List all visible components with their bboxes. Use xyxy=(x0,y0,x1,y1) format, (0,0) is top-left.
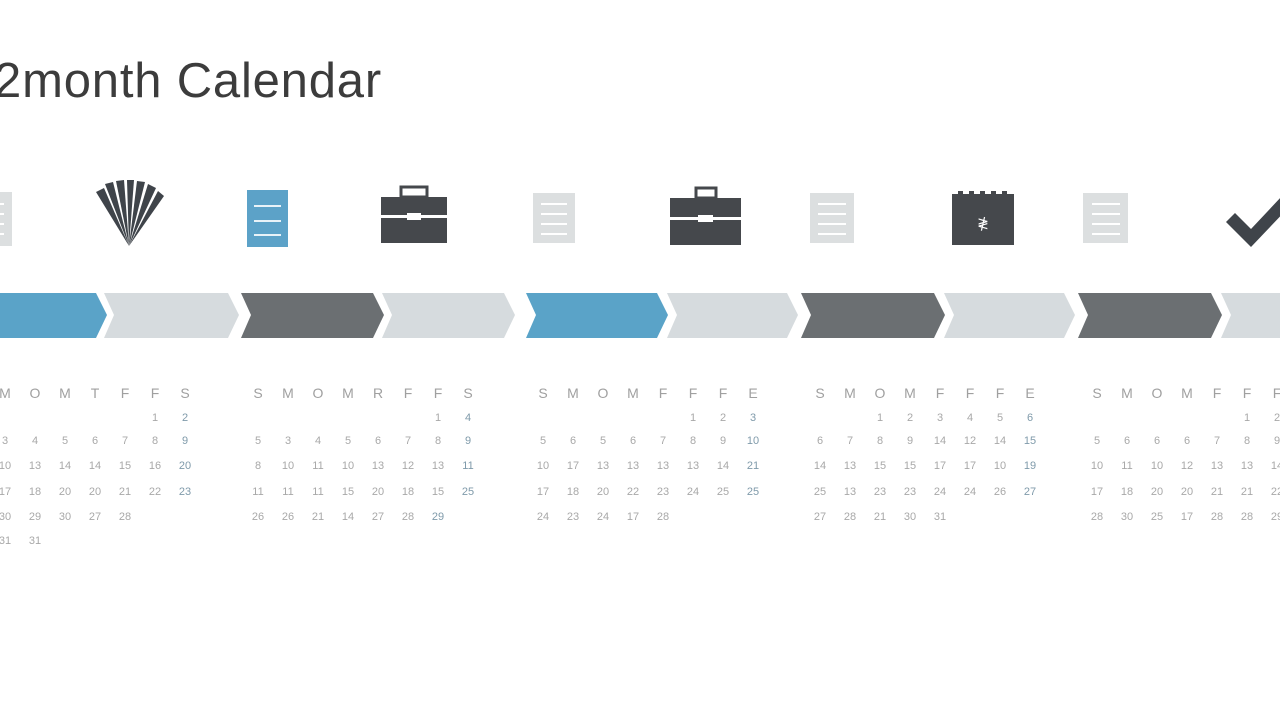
calendar 5: O xyxy=(1152,385,1163,401)
calendar 3: 2 xyxy=(720,412,726,424)
calendar 5: F xyxy=(1243,385,1251,401)
calendar 4: 19 xyxy=(1024,460,1036,472)
calendar 3: 25 xyxy=(747,486,759,498)
calendar 4: 14 xyxy=(814,460,826,472)
calendar 5: 9 xyxy=(1274,435,1280,447)
calendar 1: F xyxy=(151,385,159,401)
calendar 1: 14 xyxy=(59,460,71,472)
calendar 4: 17 xyxy=(934,460,946,472)
calendar 3: 13 xyxy=(627,460,639,472)
calendar 4: 4 xyxy=(967,412,973,424)
calendar 4: 14 xyxy=(994,435,1006,447)
calendar 5: 8 xyxy=(1244,435,1250,447)
calendar 2: 10 xyxy=(342,460,354,472)
calendar 5: 28 xyxy=(1091,511,1103,523)
icon: notepad: ≹ xyxy=(977,215,989,231)
icon: briefcase 2 xyxy=(670,188,741,245)
calendar 3: 24 xyxy=(687,486,699,498)
calendar 3: F xyxy=(689,385,697,401)
calendar 4: 2 xyxy=(907,412,913,424)
calendar 1: 18 xyxy=(29,486,41,498)
calendar 3: 28 xyxy=(657,511,669,523)
calendar 4: 12 xyxy=(964,435,976,447)
calendar 3: E xyxy=(748,385,758,401)
calendar 1: 20 xyxy=(89,486,101,498)
calendar 4: 30 xyxy=(904,511,916,523)
calendar 4: 13 xyxy=(844,460,856,472)
calendar 3: F xyxy=(659,385,667,401)
calendar 5: 13 xyxy=(1211,460,1223,472)
calendar 3: F xyxy=(719,385,727,401)
calendar 4: 21 xyxy=(874,511,886,523)
calendar 2: 4 xyxy=(315,435,321,447)
calendar 5: 6 xyxy=(1154,435,1160,447)
calendar 4: 6 xyxy=(1027,412,1033,424)
calendar 3: 17 xyxy=(627,511,639,523)
calendar 2: 13 xyxy=(432,460,444,472)
calendar 5: 7 xyxy=(1214,435,1220,447)
calendar 1: 15 xyxy=(119,460,131,472)
calendar 1: O xyxy=(30,385,41,401)
calendar 3: O xyxy=(598,385,609,401)
icon: document blue xyxy=(247,190,288,247)
calendar 1: 31 xyxy=(29,535,41,547)
calendar 1: M xyxy=(59,385,71,401)
calendar 3: 10 xyxy=(537,460,549,472)
calendar 2: 21 xyxy=(312,511,324,523)
calendar 2: R xyxy=(373,385,383,401)
calendar 5 xyxy=(1091,385,1280,523)
calendar 3: 7 xyxy=(660,435,666,447)
calendar 3: 5 xyxy=(540,435,546,447)
calendar 1: 6 xyxy=(92,435,98,447)
calendar 5: 20 xyxy=(1181,486,1193,498)
calendar 3: 6 xyxy=(630,435,636,447)
calendar 5: 1 xyxy=(1244,412,1250,424)
calendar 1: 20 xyxy=(179,460,191,472)
calendar 2: 8 xyxy=(255,460,261,472)
icon: notepad xyxy=(952,191,1014,245)
calendar 3: 21 xyxy=(747,460,759,472)
calendar 4: F xyxy=(966,385,974,401)
icon: briefcase xyxy=(381,187,447,243)
calendar 4: 3 xyxy=(937,412,943,424)
calendar 4: 7 xyxy=(847,435,853,447)
calendar 3: 1 xyxy=(690,412,696,424)
calendar 3: 10 xyxy=(747,435,759,447)
calendar 2: 18 xyxy=(402,486,414,498)
calendar 1: 16 xyxy=(149,460,161,472)
calendar 4: 24 xyxy=(964,486,976,498)
calendar 3: 18 xyxy=(567,486,579,498)
calendar 4: 23 xyxy=(904,486,916,498)
calendar 3: 23 xyxy=(567,511,579,523)
calendar 1: 28 xyxy=(119,511,131,523)
calendar 2: M xyxy=(342,385,354,401)
calendar 5: 21 xyxy=(1211,486,1223,498)
calendar 3 xyxy=(537,385,759,523)
calendar 4: 27 xyxy=(1024,486,1036,498)
calendar 2: 29 xyxy=(432,511,444,523)
calendar 2: 5 xyxy=(345,435,351,447)
calendar 5: 6 xyxy=(1124,435,1130,447)
calendar 5: 20 xyxy=(1151,486,1163,498)
icon: fan xyxy=(96,180,164,246)
calendar 3: 5 xyxy=(600,435,606,447)
calendar 2: 12 xyxy=(402,460,414,472)
calendar 2: 25 xyxy=(462,486,474,498)
calendar 2: 14 xyxy=(342,511,354,523)
calendar 2: 11 xyxy=(312,460,324,472)
calendar 1: 2 xyxy=(182,412,188,424)
calendar 4: F xyxy=(936,385,944,401)
calendar 4: 6 xyxy=(817,435,823,447)
calendar 2: S xyxy=(463,385,473,401)
calendar 4: F xyxy=(996,385,1004,401)
calendar 4: 25 xyxy=(814,486,826,498)
calendar 1: 20 xyxy=(59,486,71,498)
calendar 3: M xyxy=(627,385,639,401)
calendar 5: 12 xyxy=(1181,460,1193,472)
icon: checkmark xyxy=(1226,196,1280,247)
timeline chevrons xyxy=(0,293,1280,338)
calendar 5: 2 xyxy=(1274,412,1280,424)
calendar 4 xyxy=(814,385,1036,523)
calendar 3: 8 xyxy=(690,435,696,447)
calendar 2: 11 xyxy=(462,460,474,472)
calendar 5: 17 xyxy=(1181,511,1193,523)
calendar 5: 10 xyxy=(1091,460,1103,472)
calendar 3: 24 xyxy=(537,511,549,523)
calendar 4: 31 xyxy=(934,511,946,523)
calendar 5: 28 xyxy=(1211,511,1223,523)
calendar 2: F xyxy=(404,385,412,401)
calendar 1: 9 xyxy=(182,435,188,447)
calendar 2: 11 xyxy=(312,486,324,498)
calendar 3: 17 xyxy=(537,486,549,498)
icon: document light 3 xyxy=(1083,193,1128,243)
calendar 4: 23 xyxy=(874,486,886,498)
calendar 2: 7 xyxy=(405,435,411,447)
calendar 3: 6 xyxy=(570,435,576,447)
calendar 2: 9 xyxy=(465,435,471,447)
calendar 4: E xyxy=(1025,385,1035,401)
calendar 3: 23 xyxy=(657,486,669,498)
calendar 1: 27 xyxy=(89,511,101,523)
calendar 5: 6 xyxy=(1184,435,1190,447)
calendar 5: 5 xyxy=(1094,435,1100,447)
calendar 5: 17 xyxy=(1091,486,1103,498)
calendar 2: F xyxy=(434,385,442,401)
calendar 1: S xyxy=(180,385,190,401)
calendar 3: 25 xyxy=(717,486,729,498)
calendar 4: 13 xyxy=(844,486,856,498)
icon: document light (partial) xyxy=(0,192,12,246)
calendar 3: 20 xyxy=(597,486,609,498)
calendar 2: 20 xyxy=(372,486,384,498)
calendar 1: 14 xyxy=(89,460,101,472)
calendar 2: 1 xyxy=(435,412,441,424)
calendar 2: 4 xyxy=(465,412,471,424)
calendar 5: M xyxy=(1121,385,1133,401)
calendar 4: 24 xyxy=(934,486,946,498)
calendar 5: S xyxy=(1092,385,1102,401)
calendar 3: S xyxy=(538,385,548,401)
calendar 2: 28 xyxy=(402,511,414,523)
calendar 3: 13 xyxy=(657,460,669,472)
calendar 5: 13 xyxy=(1241,460,1253,472)
calendar 2: S xyxy=(253,385,263,401)
calendar 4: 26 xyxy=(994,486,1006,498)
calendar 4: 1 xyxy=(877,412,883,424)
calendar 1: 30 xyxy=(59,511,71,523)
calendar 1: 21 xyxy=(119,486,131,498)
calendar 2: 27 xyxy=(372,511,384,523)
calendar 2: O xyxy=(313,385,324,401)
calendar 4: O xyxy=(875,385,886,401)
calendar 2: 6 xyxy=(375,435,381,447)
calendar 4: S xyxy=(815,385,825,401)
calendar 5: 28 xyxy=(1241,511,1253,523)
icon: document light xyxy=(533,193,575,243)
calendar 5: M xyxy=(1181,385,1193,401)
calendar 4: 10 xyxy=(994,460,1006,472)
calendar 2: 15 xyxy=(342,486,354,498)
calendar 4: M xyxy=(904,385,916,401)
calendar 3: 13 xyxy=(687,460,699,472)
calendar 5: 18 xyxy=(1121,486,1133,498)
calendar 1 xyxy=(0,385,191,547)
calendar 2: 13 xyxy=(372,460,384,472)
calendar 2: 11 xyxy=(252,486,264,498)
calendar 4: 9 xyxy=(907,435,913,447)
calendar 5: 21 xyxy=(1241,486,1253,498)
calendar 2: 26 xyxy=(282,511,294,523)
calendar 2: 10 xyxy=(282,460,294,472)
calendar 4: 15 xyxy=(874,460,886,472)
calendar 5: 11 xyxy=(1121,460,1133,472)
calendar 3: 3 xyxy=(750,412,756,424)
calendar 1: 4 xyxy=(32,435,38,447)
calendar 1: 7 xyxy=(122,435,128,447)
calendar 5: 25 xyxy=(1151,511,1163,523)
calendar 1: 8 xyxy=(152,435,158,447)
calendar 3: 22 xyxy=(627,486,639,498)
calendar 4: 5 xyxy=(997,412,1003,424)
calendar 4: 15 xyxy=(1024,435,1036,447)
calendar 3: 13 xyxy=(597,460,609,472)
calendar 2: 5 xyxy=(255,435,261,447)
calendar 2: 11 xyxy=(282,486,294,498)
calendar 1: 5 xyxy=(62,435,68,447)
calendar 4: M xyxy=(844,385,856,401)
calendar 4: 8 xyxy=(877,435,883,447)
calendar 2: 15 xyxy=(432,486,444,498)
calendar 4: 14 xyxy=(934,435,946,447)
calendar 3: 24 xyxy=(597,511,609,523)
calendar 2: 26 xyxy=(252,511,264,523)
calendar 1: 1 xyxy=(152,412,158,424)
calendar 1: 13 xyxy=(29,460,41,472)
calendar 3: 17 xyxy=(567,460,579,472)
calendar 2: 3 xyxy=(285,435,291,447)
calendar 5: 30 xyxy=(1121,511,1133,523)
calendar 1: 3 xyxy=(2,435,8,447)
calendar 5: F xyxy=(1213,385,1221,401)
calendar 4: 15 xyxy=(904,460,916,472)
calendar 4: 17 xyxy=(964,460,976,472)
calendar 2: 8 xyxy=(435,435,441,447)
icons row xyxy=(0,180,1280,247)
calendar 3: 14 xyxy=(717,460,729,472)
calendar 4: 28 xyxy=(844,511,856,523)
calendar 3: M xyxy=(567,385,579,401)
calendar 1: 22 xyxy=(149,486,161,498)
calendar 1: F xyxy=(121,385,129,401)
calendar 1: 29 xyxy=(29,511,41,523)
calendar 1: 23 xyxy=(179,486,191,498)
calendar 4: 27 xyxy=(814,511,826,523)
calendar 5: 10 xyxy=(1151,460,1163,472)
calendar 2 xyxy=(252,385,474,523)
calendar 1: T xyxy=(91,385,100,401)
calendar 2: M xyxy=(282,385,294,401)
icon: document light 2 xyxy=(810,193,854,243)
calendar 3: 9 xyxy=(720,435,726,447)
